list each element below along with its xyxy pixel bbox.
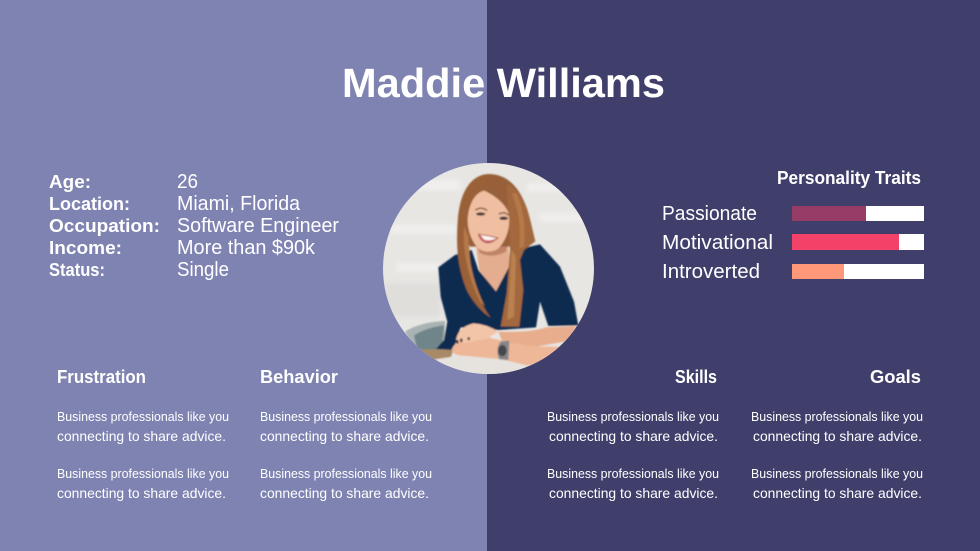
hands (456, 323, 498, 343)
demographic values: Single (177, 259, 229, 281)
heading: personality traits: Personality Traits (777, 168, 921, 188)
column: skills: connecting to share advice. (549, 485, 718, 501)
arms (498, 326, 576, 347)
column: goals (751, 367, 923, 501)
demographic values (177, 171, 339, 281)
demographic labels (49, 172, 160, 280)
column: goals: Goals (870, 367, 921, 387)
column: goals: Business professionals like you (751, 466, 923, 481)
panel: personality traits (662, 168, 924, 283)
panel: left background (0, 0, 487, 551)
title: Maddie Williams (342, 60, 665, 106)
trait: motivational (662, 232, 924, 254)
column: goals: connecting to share advice. (753, 428, 922, 444)
shirt (436, 244, 578, 350)
column: goals: connecting to share advice. (753, 485, 922, 501)
column: frustration: Frustration (57, 367, 146, 387)
column: behavior: connecting to share advice. (260, 485, 429, 501)
demographic values: Software Engineer (177, 215, 339, 237)
column: behavior: Business professionals like you (260, 409, 432, 424)
column: frustration: connecting to share advice. (57, 485, 226, 501)
demographic labels: Location: (49, 194, 130, 214)
column: frustration (57, 367, 229, 501)
chair (405, 321, 445, 350)
column: frustration: Business professionals like you (57, 466, 229, 481)
column: goals: Business professionals like you (751, 409, 923, 424)
demographic values: More than $90k (177, 237, 316, 259)
column: skills: Skills (675, 367, 717, 387)
smile (478, 234, 499, 243)
hair right lock (501, 183, 535, 327)
column: behavior: Behavior (260, 367, 338, 387)
photo: woman in navy shirt (382, 162, 597, 380)
neck (476, 245, 510, 291)
hair left lock (457, 174, 491, 318)
demographic labels: Occupation: (49, 216, 160, 236)
hair cap (458, 174, 533, 247)
column: frustration: connecting to share advice. (57, 428, 226, 444)
eyes (476, 212, 485, 216)
panel: demographics (49, 171, 339, 281)
column: behavior: connecting to share advice. (260, 428, 429, 444)
trait: passionate (662, 203, 924, 225)
column: behavior (260, 367, 432, 501)
hair highlights (512, 193, 525, 248)
face (468, 191, 509, 251)
panel: right background (487, 0, 980, 551)
table (420, 349, 453, 361)
demographic values: Miami, Florida (177, 193, 301, 215)
trait: introverted (662, 261, 924, 283)
column: skills: connecting to share advice. (549, 428, 718, 444)
demographic values: 26 (177, 171, 198, 193)
trait: passionate: Passionate (662, 203, 757, 225)
demographic labels: Age: (49, 172, 91, 192)
trait: motivational: Motivational (662, 232, 773, 254)
column: behavior: Business professionals like you (260, 466, 432, 481)
watch (497, 341, 509, 360)
demographic labels: Status: (49, 260, 105, 280)
column: frustration: Business professionals like you (57, 409, 229, 424)
column: skills (547, 367, 719, 501)
column: skills: Business professionals like you (547, 466, 719, 481)
column: skills: Business professionals like you (547, 409, 719, 424)
trait: introverted: Introverted (662, 261, 760, 283)
demographic labels: Income: (49, 238, 122, 258)
